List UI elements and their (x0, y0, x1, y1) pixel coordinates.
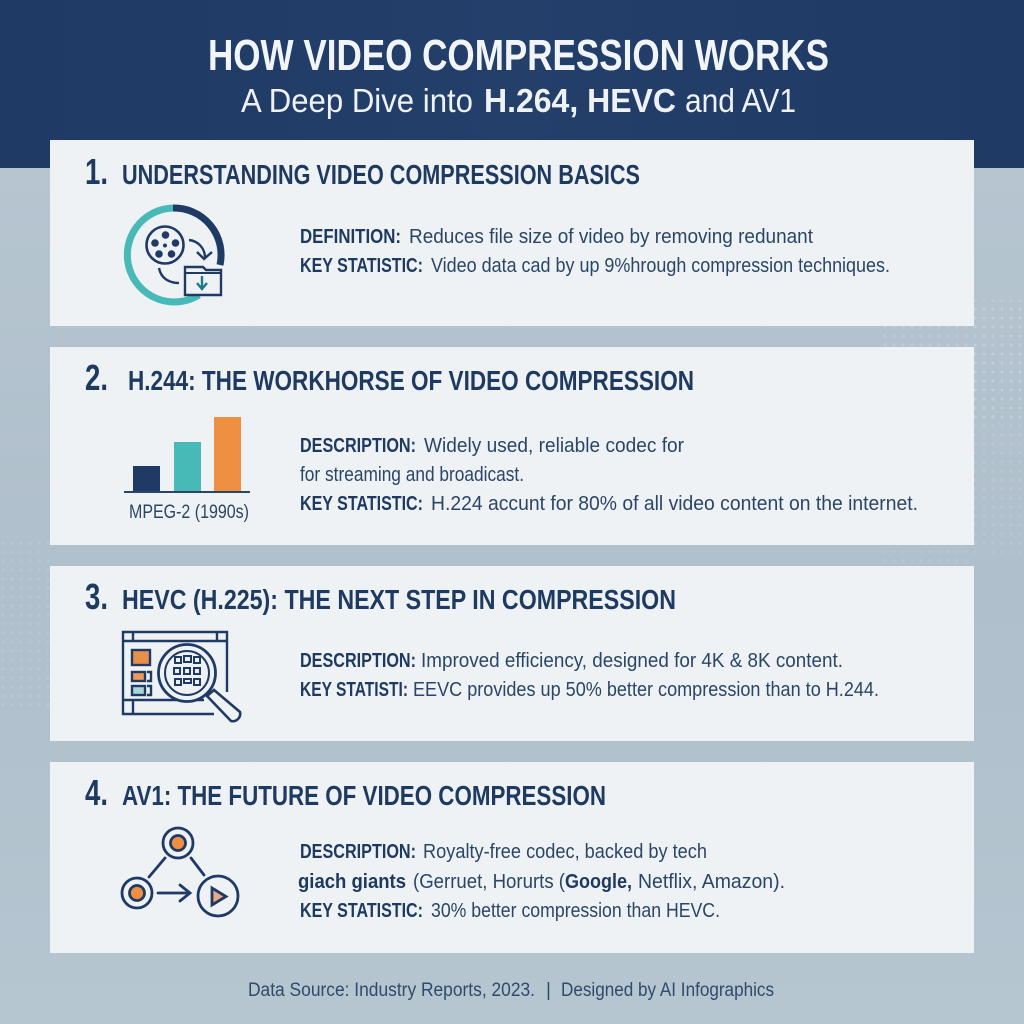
definition text: DEFINITION: (300, 225, 401, 248)
heading 4: AV1: THE FUTURE OF VIDEO COMPRESSION (122, 780, 606, 811)
heading 3: HEVC (H.225): THE NEXT STEP IN COMPRESSION (122, 584, 676, 615)
description text 4: Google, (565, 870, 632, 893)
subtitle (241, 82, 796, 119)
number 3: 3. (85, 576, 108, 617)
key statistic text 3: EEVC provides up 50% better compression than to H.244. (413, 678, 879, 701)
heading 1: UNDERSTANDING VIDEO COMPRESSION BASICS (122, 159, 640, 190)
description text 2: DESCRIPTION: (300, 434, 416, 457)
icon: film reel to folder (127, 208, 221, 302)
description text 3: DESCRIPTION: (300, 649, 416, 672)
icon: magnified video frame (123, 632, 240, 721)
description text 4: Netflix, Amazon). (638, 870, 785, 893)
footer source line: | (546, 980, 551, 1001)
card background 1 (50, 140, 974, 326)
subtitle: A Deep Dive into (241, 82, 473, 119)
number 1: 1. (85, 151, 108, 192)
number 2: 2. (85, 357, 108, 398)
description text 4 (298, 840, 785, 893)
heading 2: H.244: THE WORKHORSE OF VIDEO COMPRESSION (128, 365, 694, 396)
panel: H.264 (50, 347, 974, 545)
number 4: 4. (85, 772, 108, 813)
key statistic text 4: KEY STATISTIC: (300, 899, 423, 922)
dotted background texture (0, 300, 1024, 710)
key statistic text 4 (300, 899, 720, 922)
description text 2: Widely used, reliable codec for (424, 434, 684, 457)
description text 2 (300, 434, 684, 486)
chart label: MPEG-2 (1990s) (129, 502, 249, 523)
key statistic text 2: H.224 accunt for 80% of all video content on the internet. (431, 492, 918, 515)
footer source line: Designed by AI Infographics (561, 980, 774, 1001)
subtitle: and AV1 (685, 82, 796, 119)
description text 4: DESCRIPTION: (300, 840, 416, 863)
card background 2 (50, 347, 974, 545)
footer source line: Data Source: Industry Reports, 2023. (248, 980, 535, 1001)
header band (0, 0, 1024, 168)
key statistic text 1: KEY STATISTIC: (300, 254, 423, 277)
definition text: Reduces file size of video by removing redunant (409, 225, 813, 248)
card background 3 (50, 566, 974, 741)
description text 2: for streaming and broadicast. (300, 463, 524, 486)
footer source line (248, 980, 774, 1001)
icon: connected nodes with play button (122, 828, 238, 916)
panel: basics (50, 140, 974, 326)
key statistic text 1: Video data cad by up 9%hrough compression techniques. (431, 254, 890, 277)
panel: AV1 (50, 762, 974, 953)
title: HOW VIDEO COMPRESSION WORKS (208, 31, 829, 80)
description text 4: Royalty-free codec, backed by tech (423, 840, 707, 863)
description text 4: (Gerruet, Horurts ( (413, 870, 565, 893)
panel: HEVC (50, 566, 974, 741)
description text 3: Improved efficiency, designed for 4K & 8K content. (421, 649, 843, 672)
key statistic text 3: KEY STATISTI: (300, 678, 408, 701)
description text 4: giach giants (298, 870, 406, 893)
bar chart (124, 417, 250, 523)
key statistic text 2: KEY STATISTIC: (300, 492, 423, 515)
card background 4 (50, 762, 974, 953)
key statistic text 4: 30% better compression than HEVC. (431, 899, 720, 922)
subtitle: H.264, HEVC (484, 82, 676, 119)
